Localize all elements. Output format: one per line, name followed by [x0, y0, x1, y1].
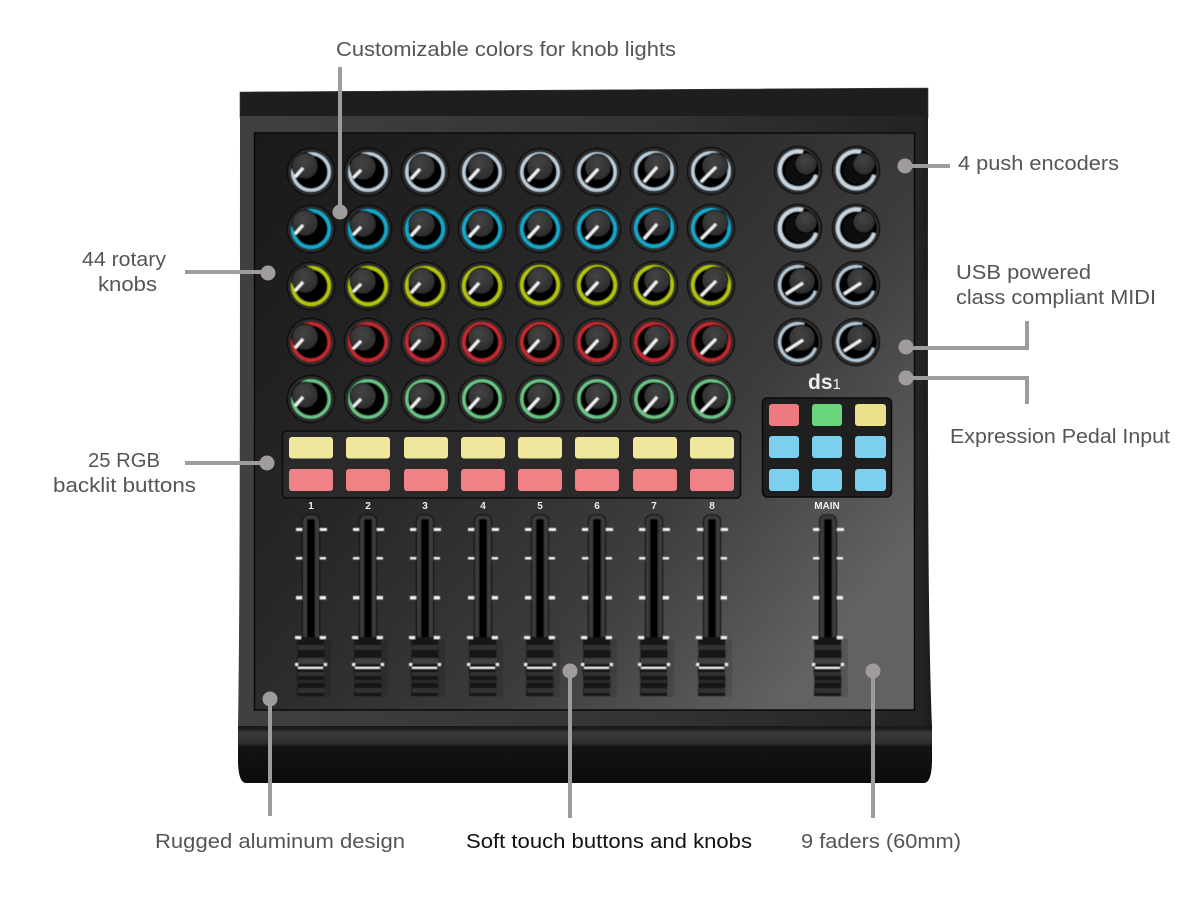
callout: rotary knobs [82, 249, 276, 296]
callout: knob light colors: Customizable colors for knob lights [336, 39, 676, 61]
callout: soft touch: Soft touch buttons and knobs [466, 831, 752, 853]
front lip [238, 726, 932, 783]
callout: soft touch [466, 664, 752, 853]
callout: RGB buttons: 25 RGB [88, 450, 160, 472]
top panel [254, 133, 914, 710]
faders [295, 515, 848, 697]
knob row 4: red [287, 318, 735, 366]
callout: push encoders: 4 push encoders [958, 153, 1119, 175]
RGB button strip [282, 431, 740, 498]
device: DS1 controller [238, 88, 932, 783]
fader number labels: 5 [537, 501, 543, 512]
aluminum frame [238, 116, 932, 727]
fader number labels: 7 [651, 501, 657, 512]
callout: RGB buttons: backlit buttons [53, 475, 196, 497]
fader number labels: 2 [365, 501, 371, 512]
9-button pad [762, 398, 892, 497]
callout: USB MIDI: class compliant MIDI [956, 287, 1156, 309]
callout: aluminum design [155, 692, 405, 853]
callout: rotary knobs: knobs [98, 274, 157, 296]
fader number labels: 4 [480, 501, 486, 512]
callout: RGB buttons [53, 450, 274, 497]
fader number labels [308, 501, 840, 512]
callout: knob light colors [332, 39, 676, 220]
knob row 1: white [287, 147, 735, 196]
fader number labels: MAIN [814, 501, 840, 512]
logo: ds1: ds1 [808, 371, 841, 394]
callout: aluminum design: Rugged aluminum design [155, 831, 405, 853]
knob row 3: yellow [287, 261, 735, 310]
knob row 5: green [287, 375, 735, 423]
callout: faders [801, 664, 961, 853]
callout: USB MIDI: USB powered [956, 262, 1091, 284]
callout: faders: 9 faders (60mm) [801, 831, 961, 853]
callout: expression pedal: Expression Pedal Input [950, 426, 1170, 448]
callout: push encoders [898, 153, 1119, 175]
knob row 2: cyan [287, 204, 735, 253]
push encoders [774, 146, 880, 366]
fader number labels: 3 [422, 501, 428, 512]
fader number labels: 8 [709, 501, 715, 512]
callout: rotary knobs: 44 rotary [82, 249, 166, 271]
fader number labels: 6 [594, 501, 600, 512]
fader number labels: 1 [308, 501, 314, 512]
top rear bar [240, 88, 928, 118]
callout: USB MIDI [898, 262, 1156, 354]
callout: expression pedal [898, 370, 1170, 448]
